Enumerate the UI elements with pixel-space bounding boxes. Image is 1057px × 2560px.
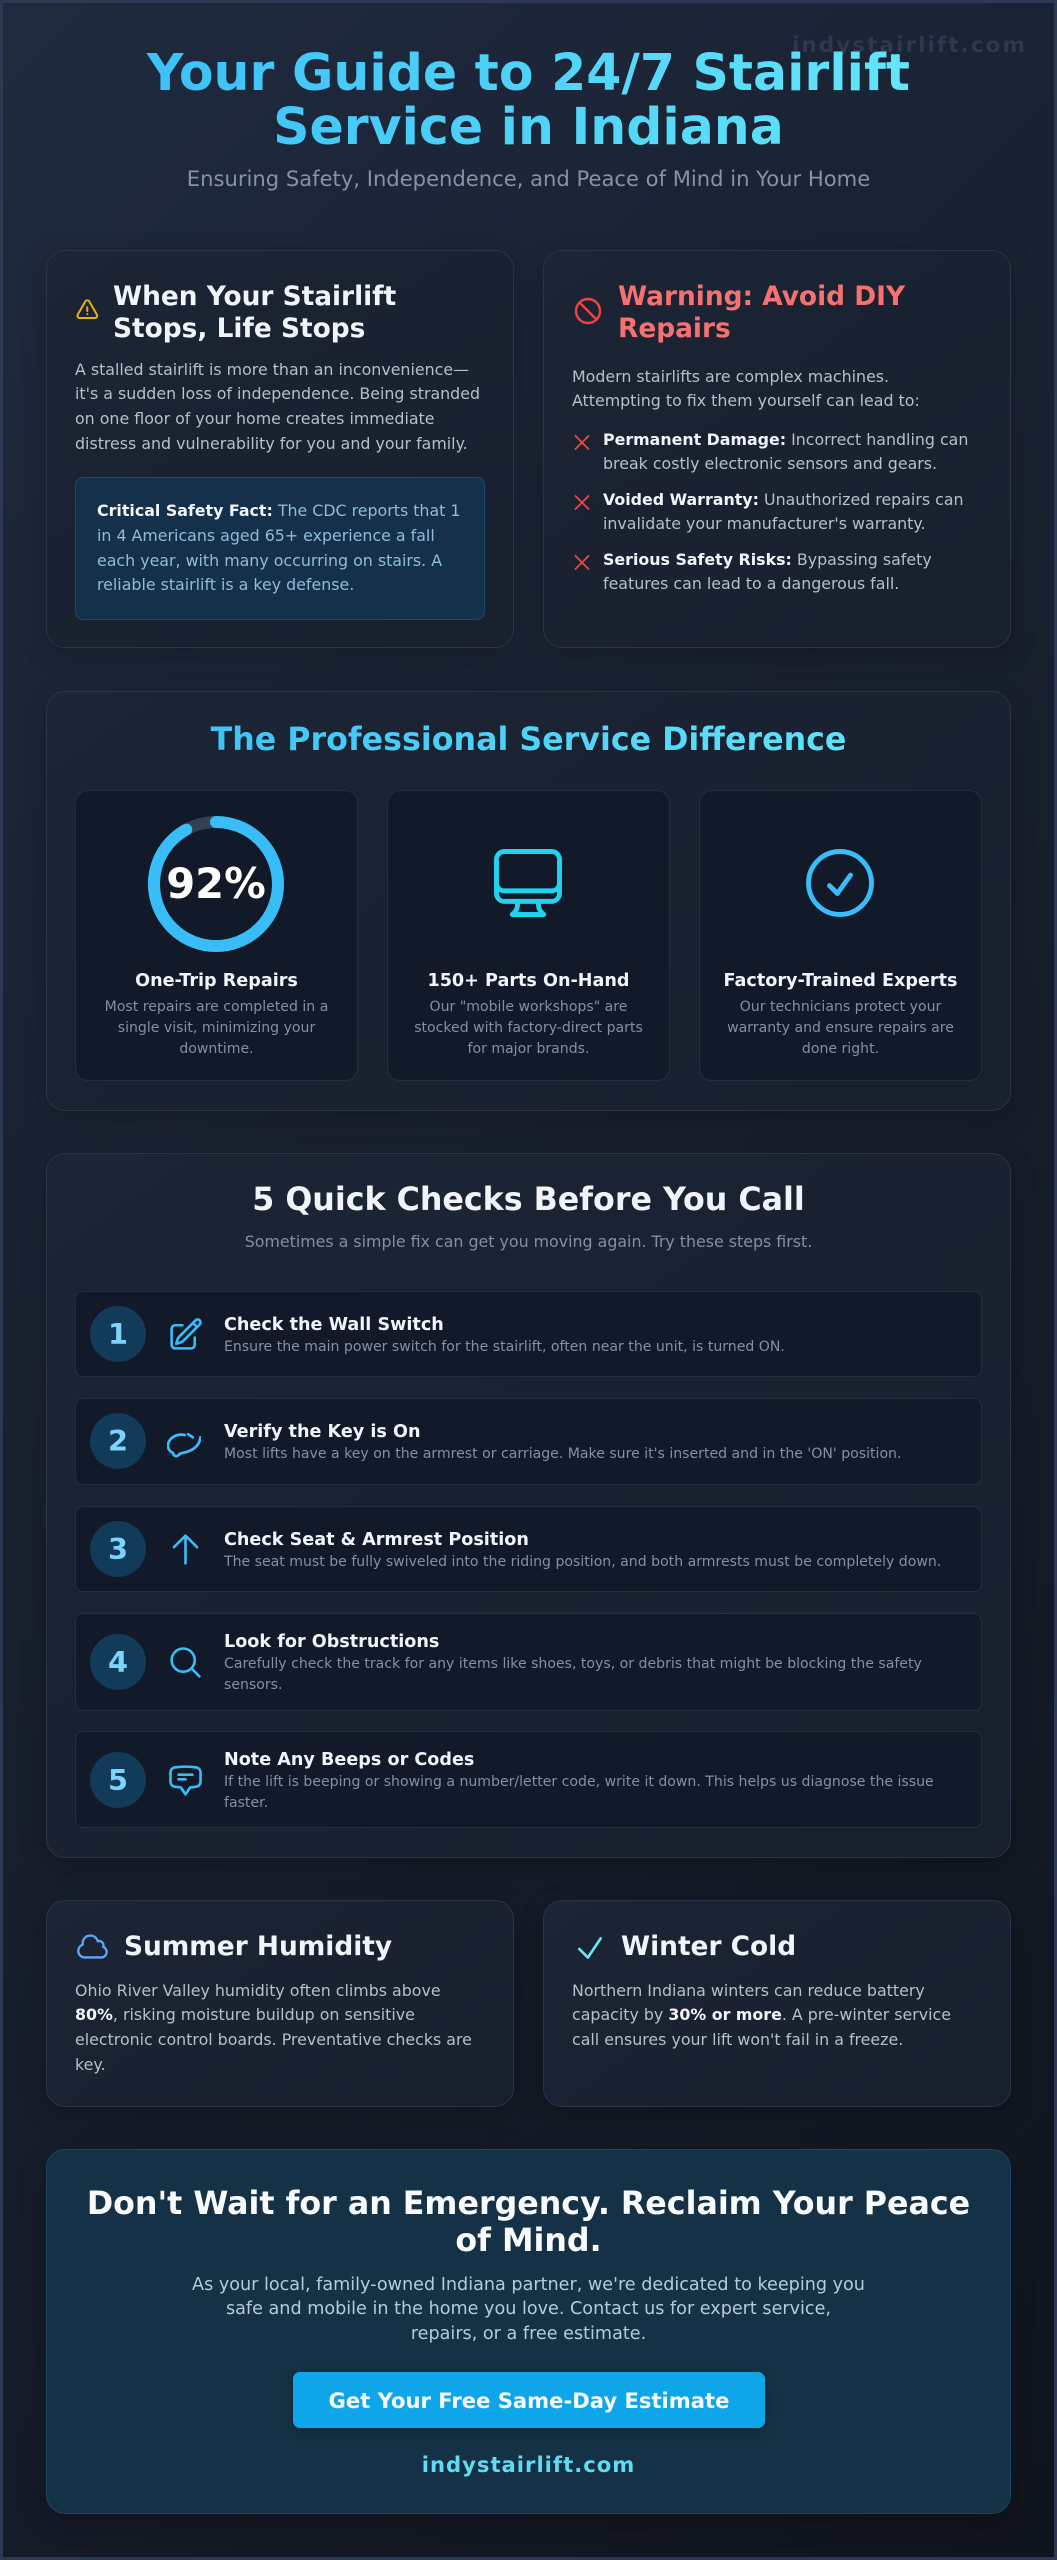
icon: pencil — [170, 1318, 202, 1350]
card text — [727, 998, 954, 1056]
panel: winter cold — [543, 1900, 1011, 2107]
paragraph: A stalled stairlift is more than an inconvenience— — [75, 360, 469, 378]
icon: check circle — [806, 849, 874, 917]
paragraph — [75, 1980, 472, 2074]
paragraph: on one floor of your home creates immediate — [75, 409, 435, 428]
panel: summer humidity — [46, 1900, 514, 2107]
icon: monitor — [494, 849, 562, 917]
number badge — [90, 1521, 146, 1577]
list of risks — [574, 430, 968, 593]
icon: prohibited — [574, 298, 602, 324]
title: Service in Indiana — [273, 96, 784, 156]
heading: Warning: Avoid DIY — [618, 280, 905, 312]
number badge: 1 — [108, 1317, 128, 1351]
risk: permanent damage: break costly electronic sensors and gears. — [603, 454, 937, 473]
heading — [87, 2186, 970, 2258]
card text: warranty and ensure repairs are — [727, 1020, 954, 1036]
title: Verify the Key is On — [224, 1422, 420, 1442]
title — [76, 46, 981, 153]
number badge: 5 — [108, 1763, 128, 1797]
card text: for major brands. — [468, 1040, 589, 1056]
paragraph: repairs, or a free estimate. — [411, 2324, 646, 2344]
paragraph: call ensures your lift won't fail in a freeze. — [572, 2030, 903, 2049]
heading: The Professional Service Difference — [211, 722, 846, 758]
panel: when your stairlift stops — [46, 250, 514, 648]
intro paragraph: Attempting to fix them yourself can lead to: — [572, 391, 920, 410]
intro paragraph — [572, 366, 920, 410]
card title: Factory-Trained Experts — [724, 970, 957, 990]
subtitle: Ensuring Safety, Independence, and Peace of Mind in Your Home — [187, 166, 870, 190]
card text: Our "mobile workshops" are — [430, 998, 627, 1014]
intro paragraph: Modern stairlifts are complex machines. — [572, 366, 889, 386]
callout text: in 4 Americans aged 65+ experience a fall — [97, 526, 435, 545]
card: factory-trained experts — [699, 790, 982, 1081]
icon: magnifier — [170, 1647, 201, 1678]
check 4 — [75, 1613, 982, 1711]
paragraph: key. — [75, 2055, 105, 2074]
risk: permanent damage: Permanent Damage: Incorrect handling can — [603, 430, 968, 448]
panel: five quick checks — [46, 1153, 1011, 1858]
watermark: indystairlift.com — [792, 33, 1027, 58]
heading: Repairs — [618, 312, 731, 344]
heading: 5 Quick Checks Before You Call — [252, 1182, 805, 1218]
callout: critical safety fact — [75, 477, 485, 620]
description: Carefully check the track for any items like shoes, toys, or debris that might be blocking the safety — [224, 1656, 922, 1672]
number badge — [90, 1752, 146, 1808]
description: sensors. — [224, 1676, 282, 1692]
heading: Don't Wait for an Emergency. Reclaim Your Peace — [87, 2186, 970, 2222]
panel: professional service difference — [46, 691, 1011, 1111]
panel: avoid DIY repairs — [543, 250, 1011, 648]
risk: voided warranty: Voided Warranty: Unauthorized repairs can — [603, 490, 964, 508]
callout text: Critical Safety Fact: The CDC reports that 1 — [97, 501, 460, 520]
donut chart: 92% — [148, 816, 284, 952]
heading — [76, 720, 981, 760]
check 2 — [75, 1398, 982, 1485]
heading: Stops, Life Stops — [113, 312, 365, 344]
card text: single visit, minimizing your — [118, 1020, 315, 1036]
paragraph: it's a sudden loss of independence. Being stranded — [75, 384, 480, 403]
paragraph: capacity by 30% or more. A pre-winter service — [572, 2005, 951, 2024]
card text: stocked with factory-direct parts — [414, 1020, 643, 1036]
card text — [105, 998, 328, 1056]
icon: cloud — [77, 1934, 108, 1959]
card text — [414, 998, 643, 1056]
risk: voided warranty — [603, 490, 964, 533]
risk: safety risks: Serious Safety Risks: Bypassing safety — [603, 550, 932, 568]
check 1 — [75, 1291, 982, 1377]
paragraph: Ohio River Valley humidity often climbs above — [75, 1980, 441, 2000]
paragraph — [572, 1980, 951, 2049]
button: Get Your Free Same-Day Estimate — [329, 2388, 729, 2413]
description: Most lifts have a key on the armrest or carriage. Make sure it's inserted and in the 'ON' position. — [224, 1446, 901, 1462]
risk: permanent damage — [603, 430, 968, 473]
paragraph: electronic control boards. Preventative checks are — [75, 2030, 472, 2049]
icon: warning triangle — [76, 299, 98, 319]
check 3 — [75, 1506, 982, 1592]
paragraph — [192, 2274, 865, 2344]
card: parts on-hand — [387, 790, 670, 1081]
icon: key — [167, 1432, 201, 1458]
paragraph: distress and vulnerability for you and your family. — [75, 434, 468, 453]
description — [224, 1774, 934, 1810]
number badge: 3 — [108, 1532, 128, 1566]
description: If the lift is beeping or showing a number/letter code, write it down. This helps us diagnose the issue — [224, 1774, 934, 1790]
website link: indystairlift.com — [422, 2452, 635, 2476]
heading — [618, 280, 906, 344]
heading: Summer Humidity — [124, 1931, 392, 1962]
heading: of Mind. — [455, 2222, 602, 2258]
number badge — [90, 1634, 146, 1690]
stat value: 92% — [166, 858, 266, 908]
risk: safety risks: features can lead to a dangerous fall. — [603, 574, 899, 593]
heading: When Your Stairlift — [113, 280, 396, 312]
card title: 150+ Parts On-Hand — [427, 970, 630, 990]
risk: safety risks — [603, 550, 932, 593]
paragraph: As your local, family-owned Indiana partner, we're dedicated to keeping you — [192, 2274, 865, 2294]
paragraph: 80%, risking moisture buildup on sensitive — [75, 2005, 415, 2024]
callout text: reliable stairlift is a key defense. — [97, 575, 354, 594]
icon: arrow up — [172, 1534, 198, 1565]
card text: downtime. — [179, 1040, 254, 1056]
heading: Winter Cold — [621, 1931, 796, 1962]
title: Check the Wall Switch — [224, 1314, 444, 1334]
paragraph — [75, 360, 480, 453]
card text: Most repairs are completed in a — [105, 998, 328, 1014]
icon: checkmark — [578, 1937, 602, 1959]
description: The seat must be fully swiveled into the riding position, and both armrests must be completely down. — [224, 1554, 941, 1570]
card title: One-Trip Repairs — [135, 970, 298, 990]
number badge: 4 — [108, 1645, 128, 1679]
card text: Our technicians protect your — [740, 998, 941, 1014]
callout text — [97, 501, 460, 594]
title: Your Guide to 24/7 Stairlift — [147, 43, 910, 102]
number badge: 2 — [108, 1424, 128, 1458]
title: Check Seat & Armrest Position — [224, 1530, 529, 1550]
number badge — [90, 1413, 146, 1469]
risk: voided warranty: invalidate your manufacturer's warranty. — [603, 514, 926, 533]
card text: done right. — [802, 1040, 879, 1056]
description: Ensure the main power switch for the stairlift, often near the unit, is turned ON. — [224, 1338, 785, 1354]
description — [224, 1656, 922, 1692]
description: faster. — [224, 1794, 268, 1810]
card: one-trip repairs — [75, 790, 358, 1081]
heading — [113, 280, 396, 344]
title: Note Any Beeps or Codes — [224, 1750, 474, 1770]
check 5 — [75, 1731, 982, 1828]
paragraph: Northern Indiana winters can reduce battery — [572, 1980, 925, 2000]
number badge — [90, 1306, 146, 1362]
paragraph: safe and mobile in the home you love. Contact us for expert service, — [226, 2299, 831, 2319]
button — [293, 2372, 765, 2428]
title: Look for Obstructions — [224, 1632, 439, 1652]
icon: chat bubble — [169, 1765, 202, 1796]
callout text: each year, with many occurring on stairs. A — [97, 551, 442, 570]
panel: call to action — [46, 2149, 1011, 2514]
subheading: Sometimes a simple fix can get you moving again. Try these steps first. — [245, 1232, 812, 1251]
icon: red crosses — [574, 435, 590, 570]
